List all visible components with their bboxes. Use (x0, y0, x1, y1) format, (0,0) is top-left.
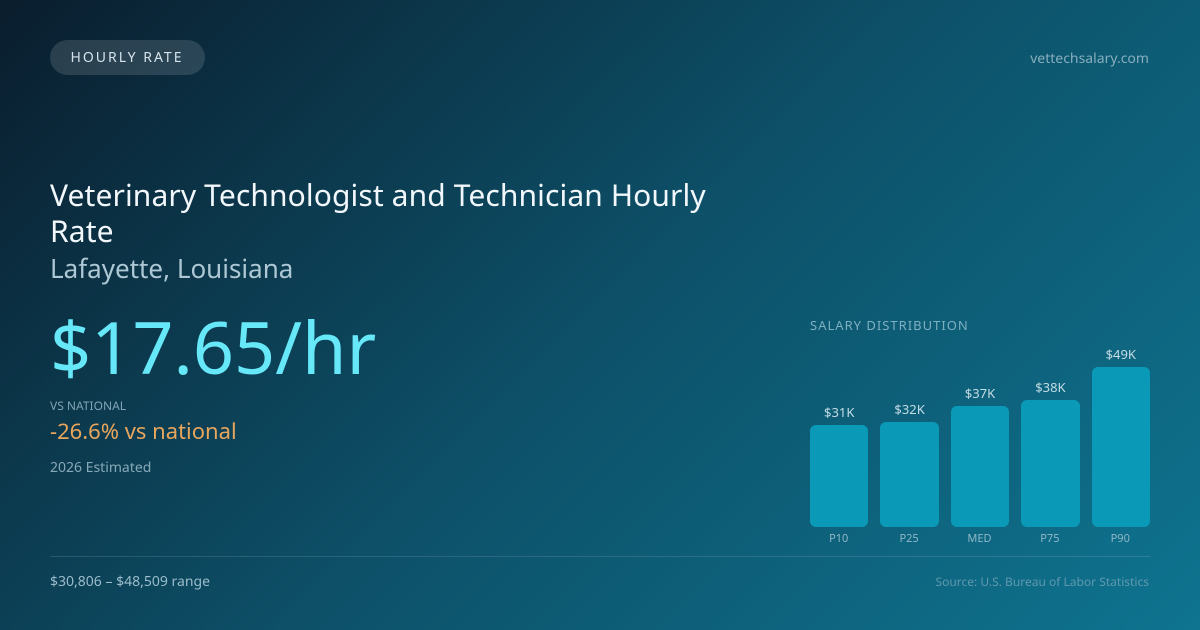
site name: vettechsalary.com (1030, 49, 1149, 68)
value MED: $37K (965, 384, 995, 402)
estimate note: 2026 Estimated (50, 458, 151, 477)
source: Source: U.S. Bureau of Labor Statistics (936, 573, 1149, 590)
label MED: MED (967, 531, 992, 546)
location subtitle: Lafayette, Louisiana (50, 250, 293, 286)
label P90: P90 (1111, 531, 1130, 546)
value P90: $49K (1106, 345, 1136, 363)
bar P10 (810, 425, 868, 527)
bar P90 (1092, 367, 1150, 527)
badge: hourly rate (50, 40, 205, 75)
value P25: $32K (894, 400, 925, 418)
value P75: $38K (1035, 378, 1066, 396)
bar MED (951, 406, 1009, 527)
value P10: $31K (824, 403, 854, 421)
vs national label: VS NATIONAL (50, 397, 126, 414)
label P75: P75 (1040, 531, 1060, 546)
chart heading: SALARY DISTRIBUTION (810, 316, 969, 334)
bar P25 (880, 422, 939, 527)
label P10: P10 (829, 531, 848, 546)
label P25: P25 (899, 531, 919, 546)
salary range: $30,806 – $48,509 range (50, 572, 210, 591)
main hourly wage: $17.65/hr (50, 298, 376, 396)
bar P75 (1021, 400, 1080, 527)
title: Veterinary Technologist and Technician Hourly Rate (50, 174, 706, 251)
vs national value: -26.6% vs national (50, 416, 237, 446)
badge: hourly rate: HOURLY RATE (70, 48, 183, 67)
